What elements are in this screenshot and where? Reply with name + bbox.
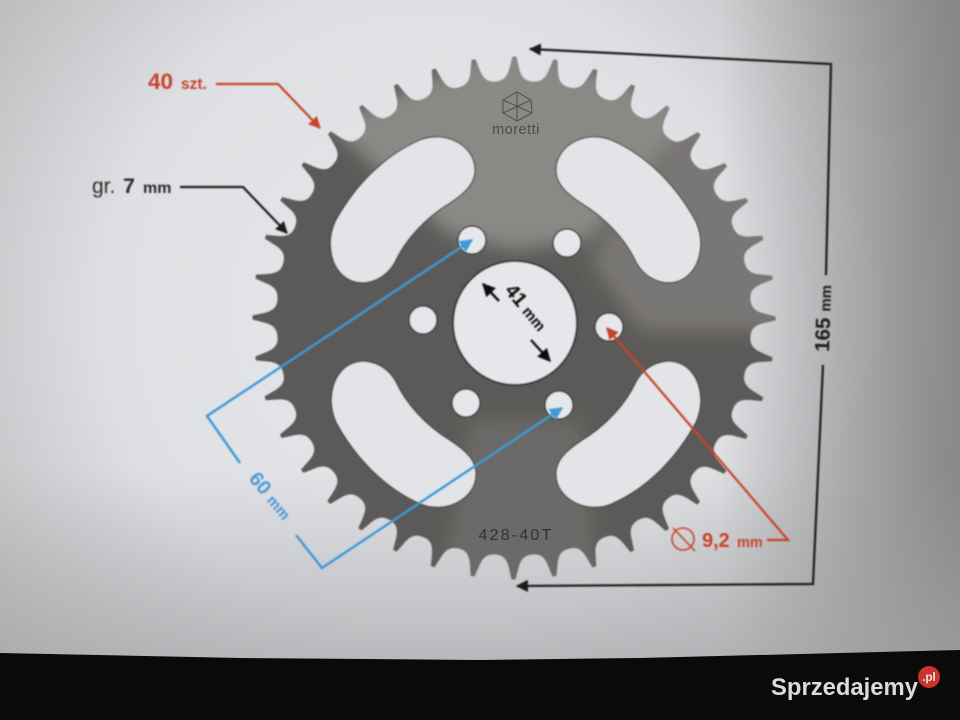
slot: bottom left xyxy=(331,361,476,507)
sprocket xyxy=(252,56,776,580)
callout: hole diameter 9,2 mm: 9,2 xyxy=(702,530,730,552)
callout: thickness 7 mm xyxy=(92,174,287,233)
callout: hole diameter 9,2 mm: mm xyxy=(737,535,763,551)
callout: 40 teeth: szt. xyxy=(181,76,207,93)
sprocket metal body xyxy=(252,56,776,580)
logo: moretti: moretti xyxy=(492,122,540,138)
dimension: bolt spacing 60 mm xyxy=(207,240,562,568)
bolt holes xyxy=(409,226,623,419)
watermark: Sprzedajemy.pl: .pl xyxy=(922,672,936,684)
dimension: bolt spacing 60 mm: 60mm xyxy=(244,468,296,524)
slot: top right xyxy=(556,137,701,283)
bottom bezel xyxy=(0,650,960,720)
watermark: Sprzedajemy.pl xyxy=(771,666,940,701)
slot: top left xyxy=(330,137,475,283)
icon: diameter symbol xyxy=(672,528,695,551)
callout: thickness 7 mm: 7 xyxy=(123,174,135,198)
callout: 40 teeth xyxy=(148,69,320,128)
callout: hole diameter 9,2 mm xyxy=(607,328,788,552)
logo: moretti xyxy=(492,92,540,138)
dimension: outer diameter 165 mm: 165mm xyxy=(811,285,836,352)
watermark: Sprzedajemy.pl: Sprzedajemy xyxy=(771,674,919,701)
dimension: bore 41 mm xyxy=(483,280,552,361)
centre bore xyxy=(453,261,577,385)
slot: bottom right xyxy=(556,361,701,507)
dimension: outer diameter 165 mm xyxy=(517,49,836,586)
callout: thickness 7 mm: mm xyxy=(143,180,171,197)
callout: thickness 7 mm: gr. xyxy=(92,175,115,198)
callout: 40 teeth: 40 xyxy=(148,69,173,94)
dimension: bore 41 mm: 41mm xyxy=(500,280,552,336)
part number stamp: 428-40T xyxy=(478,527,554,544)
